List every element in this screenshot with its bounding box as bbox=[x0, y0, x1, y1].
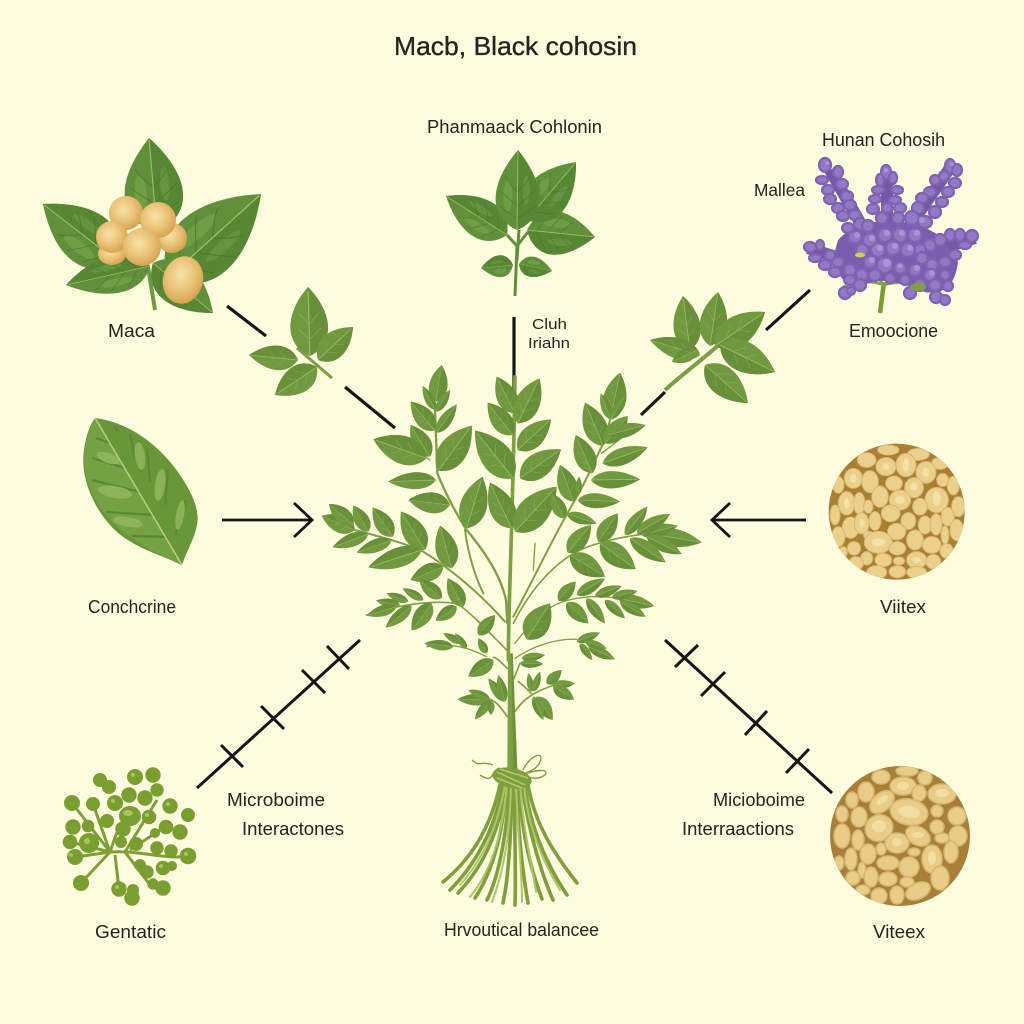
connector: right barred line bbox=[665, 640, 832, 793]
panel: right branch sprig bbox=[647, 290, 782, 414]
root binding bbox=[472, 755, 546, 792]
panel: left branch sprig bbox=[248, 286, 362, 406]
label: Cluh: Cluh bbox=[532, 316, 567, 333]
label: Viteex: Viteex bbox=[873, 921, 926, 942]
stems: right half bbox=[513, 418, 652, 658]
label: Gentatic: Gentatic bbox=[95, 921, 166, 942]
label: Phanmaack Cohlonin: Phanmaack Cohlonin bbox=[427, 116, 602, 137]
connector: left barred line bbox=[197, 640, 360, 788]
label: Hrvoutical balancee: Hrvoutical balancee bbox=[444, 919, 599, 940]
leaflets: right half bbox=[504, 370, 703, 664]
arrow: right pointing bbox=[222, 503, 312, 537]
label: Conchcrine: Conchcrine bbox=[88, 596, 176, 617]
panel: top center plant bbox=[436, 148, 597, 296]
stems: left half bbox=[355, 377, 515, 660]
label: Iriahn: Iriahn bbox=[528, 335, 570, 352]
leaflets: left half bbox=[318, 364, 525, 655]
stems: lower trunk bbox=[490, 653, 552, 770]
panel: seed texture circle bbox=[829, 444, 965, 580]
label: Viitex: Viitex bbox=[880, 596, 927, 617]
label: Hunan Cohosih: Hunan Cohosih bbox=[822, 129, 945, 150]
panel: central herb bbox=[318, 364, 703, 905]
label: Microboime: Microboime bbox=[227, 789, 325, 810]
leaflets: lowest clusters bbox=[457, 654, 577, 724]
panel: brown seed texture circle bbox=[830, 766, 970, 906]
label: Interactones: Interactones bbox=[242, 818, 344, 839]
panel: single large leaf bbox=[83, 418, 198, 565]
panel: green berry cluster bbox=[63, 767, 196, 906]
arrows: upper connectors bbox=[227, 290, 810, 428]
label: Mallea: Mallea bbox=[754, 180, 805, 200]
panel: purple flowering plant bbox=[804, 158, 978, 313]
arrow: left pointing bbox=[712, 503, 806, 537]
label: Emoocione: Emoocione bbox=[849, 320, 938, 341]
label: Interraactions: Interraactions bbox=[682, 818, 794, 839]
label: Maca: Maca bbox=[108, 320, 156, 341]
panel: maca plant with tubers bbox=[26, 136, 283, 329]
roots bbox=[443, 785, 577, 905]
title: Macb, Black cohosin bbox=[394, 31, 637, 61]
label: Micioboime: Micioboime bbox=[713, 789, 805, 810]
